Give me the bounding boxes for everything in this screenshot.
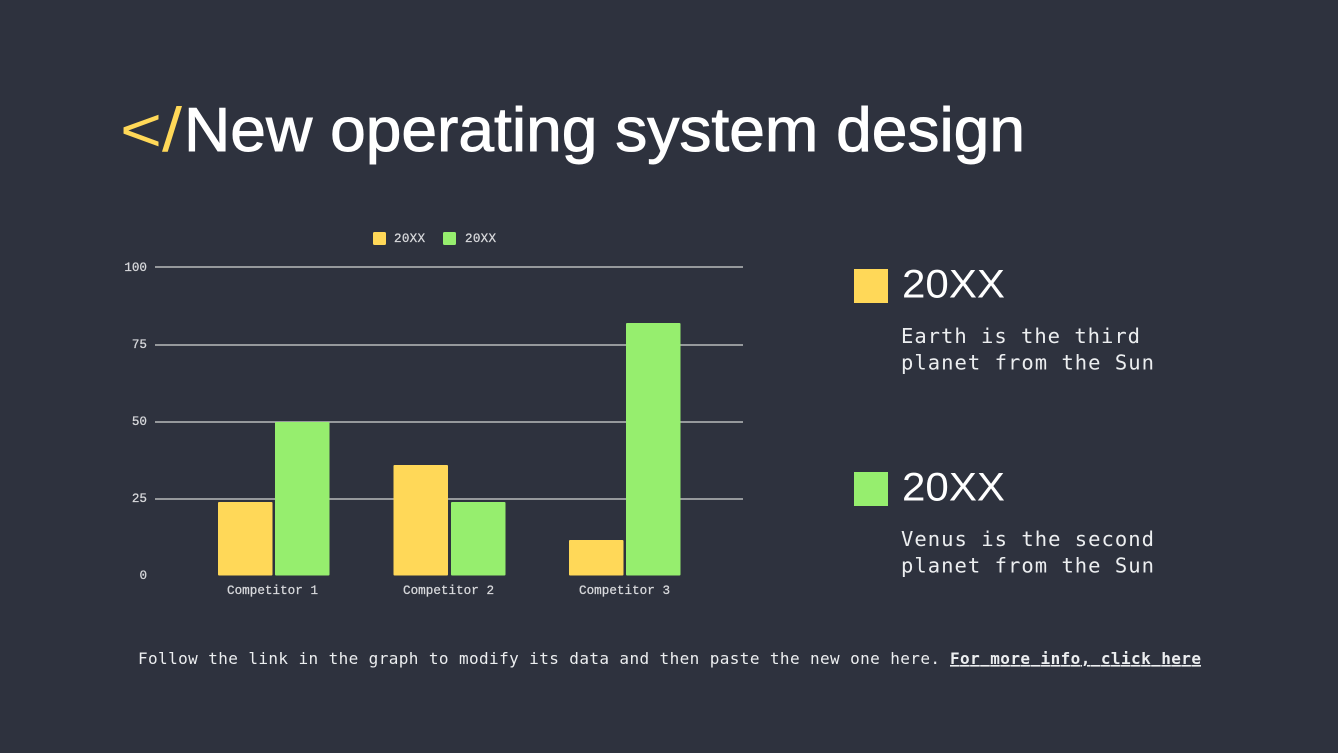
bars: competitor 1	[218, 422, 330, 576]
heading: yellow 20XX: 20XX	[902, 262, 1005, 306]
icon: green square	[854, 472, 888, 506]
chart legend: 20XX	[394, 232, 425, 246]
chart gridlines	[155, 267, 743, 499]
chart legend: 20XX	[465, 232, 496, 246]
x-axis labels: Competitor 3	[579, 584, 670, 598]
text block: Venus: planet from the Sun	[901, 554, 1154, 578]
x-axis labels: Competitor 2	[403, 584, 494, 598]
title: New operating system design	[184, 96, 1025, 165]
y-axis labels: 0	[139, 569, 147, 583]
footer note: Follow the link in the graph to modify its data and then paste the new one here.	[138, 649, 940, 668]
x-axis labels	[227, 584, 670, 598]
bars: competitor 3	[569, 323, 680, 576]
text block: Earth: planet from the Sun	[901, 350, 1154, 374]
y-axis labels: 50	[132, 415, 147, 429]
y-axis labels: 100	[124, 261, 147, 275]
icon: yellow square	[854, 269, 888, 303]
text block: Earth: Earth is the third	[901, 324, 1140, 348]
title: </	[120, 96, 183, 165]
heading: green 20XX: 20XX	[902, 466, 1005, 510]
footer note: For more info, click here	[950, 649, 1201, 668]
text block: Venus: Venus is the second	[901, 527, 1154, 551]
bar chart	[124, 232, 743, 598]
chart legend	[373, 232, 496, 246]
text block: Venus	[901, 527, 1154, 578]
x-axis labels: Competitor 1	[227, 584, 318, 598]
legend item: green 20XX	[854, 466, 1154, 578]
y-axis labels	[124, 261, 147, 583]
text block: Earth	[901, 324, 1154, 374]
y-axis labels: 75	[132, 338, 147, 352]
bars: competitor 2	[394, 465, 506, 576]
legend item: yellow 20XX	[854, 262, 1154, 374]
y-axis labels: 25	[132, 492, 147, 506]
